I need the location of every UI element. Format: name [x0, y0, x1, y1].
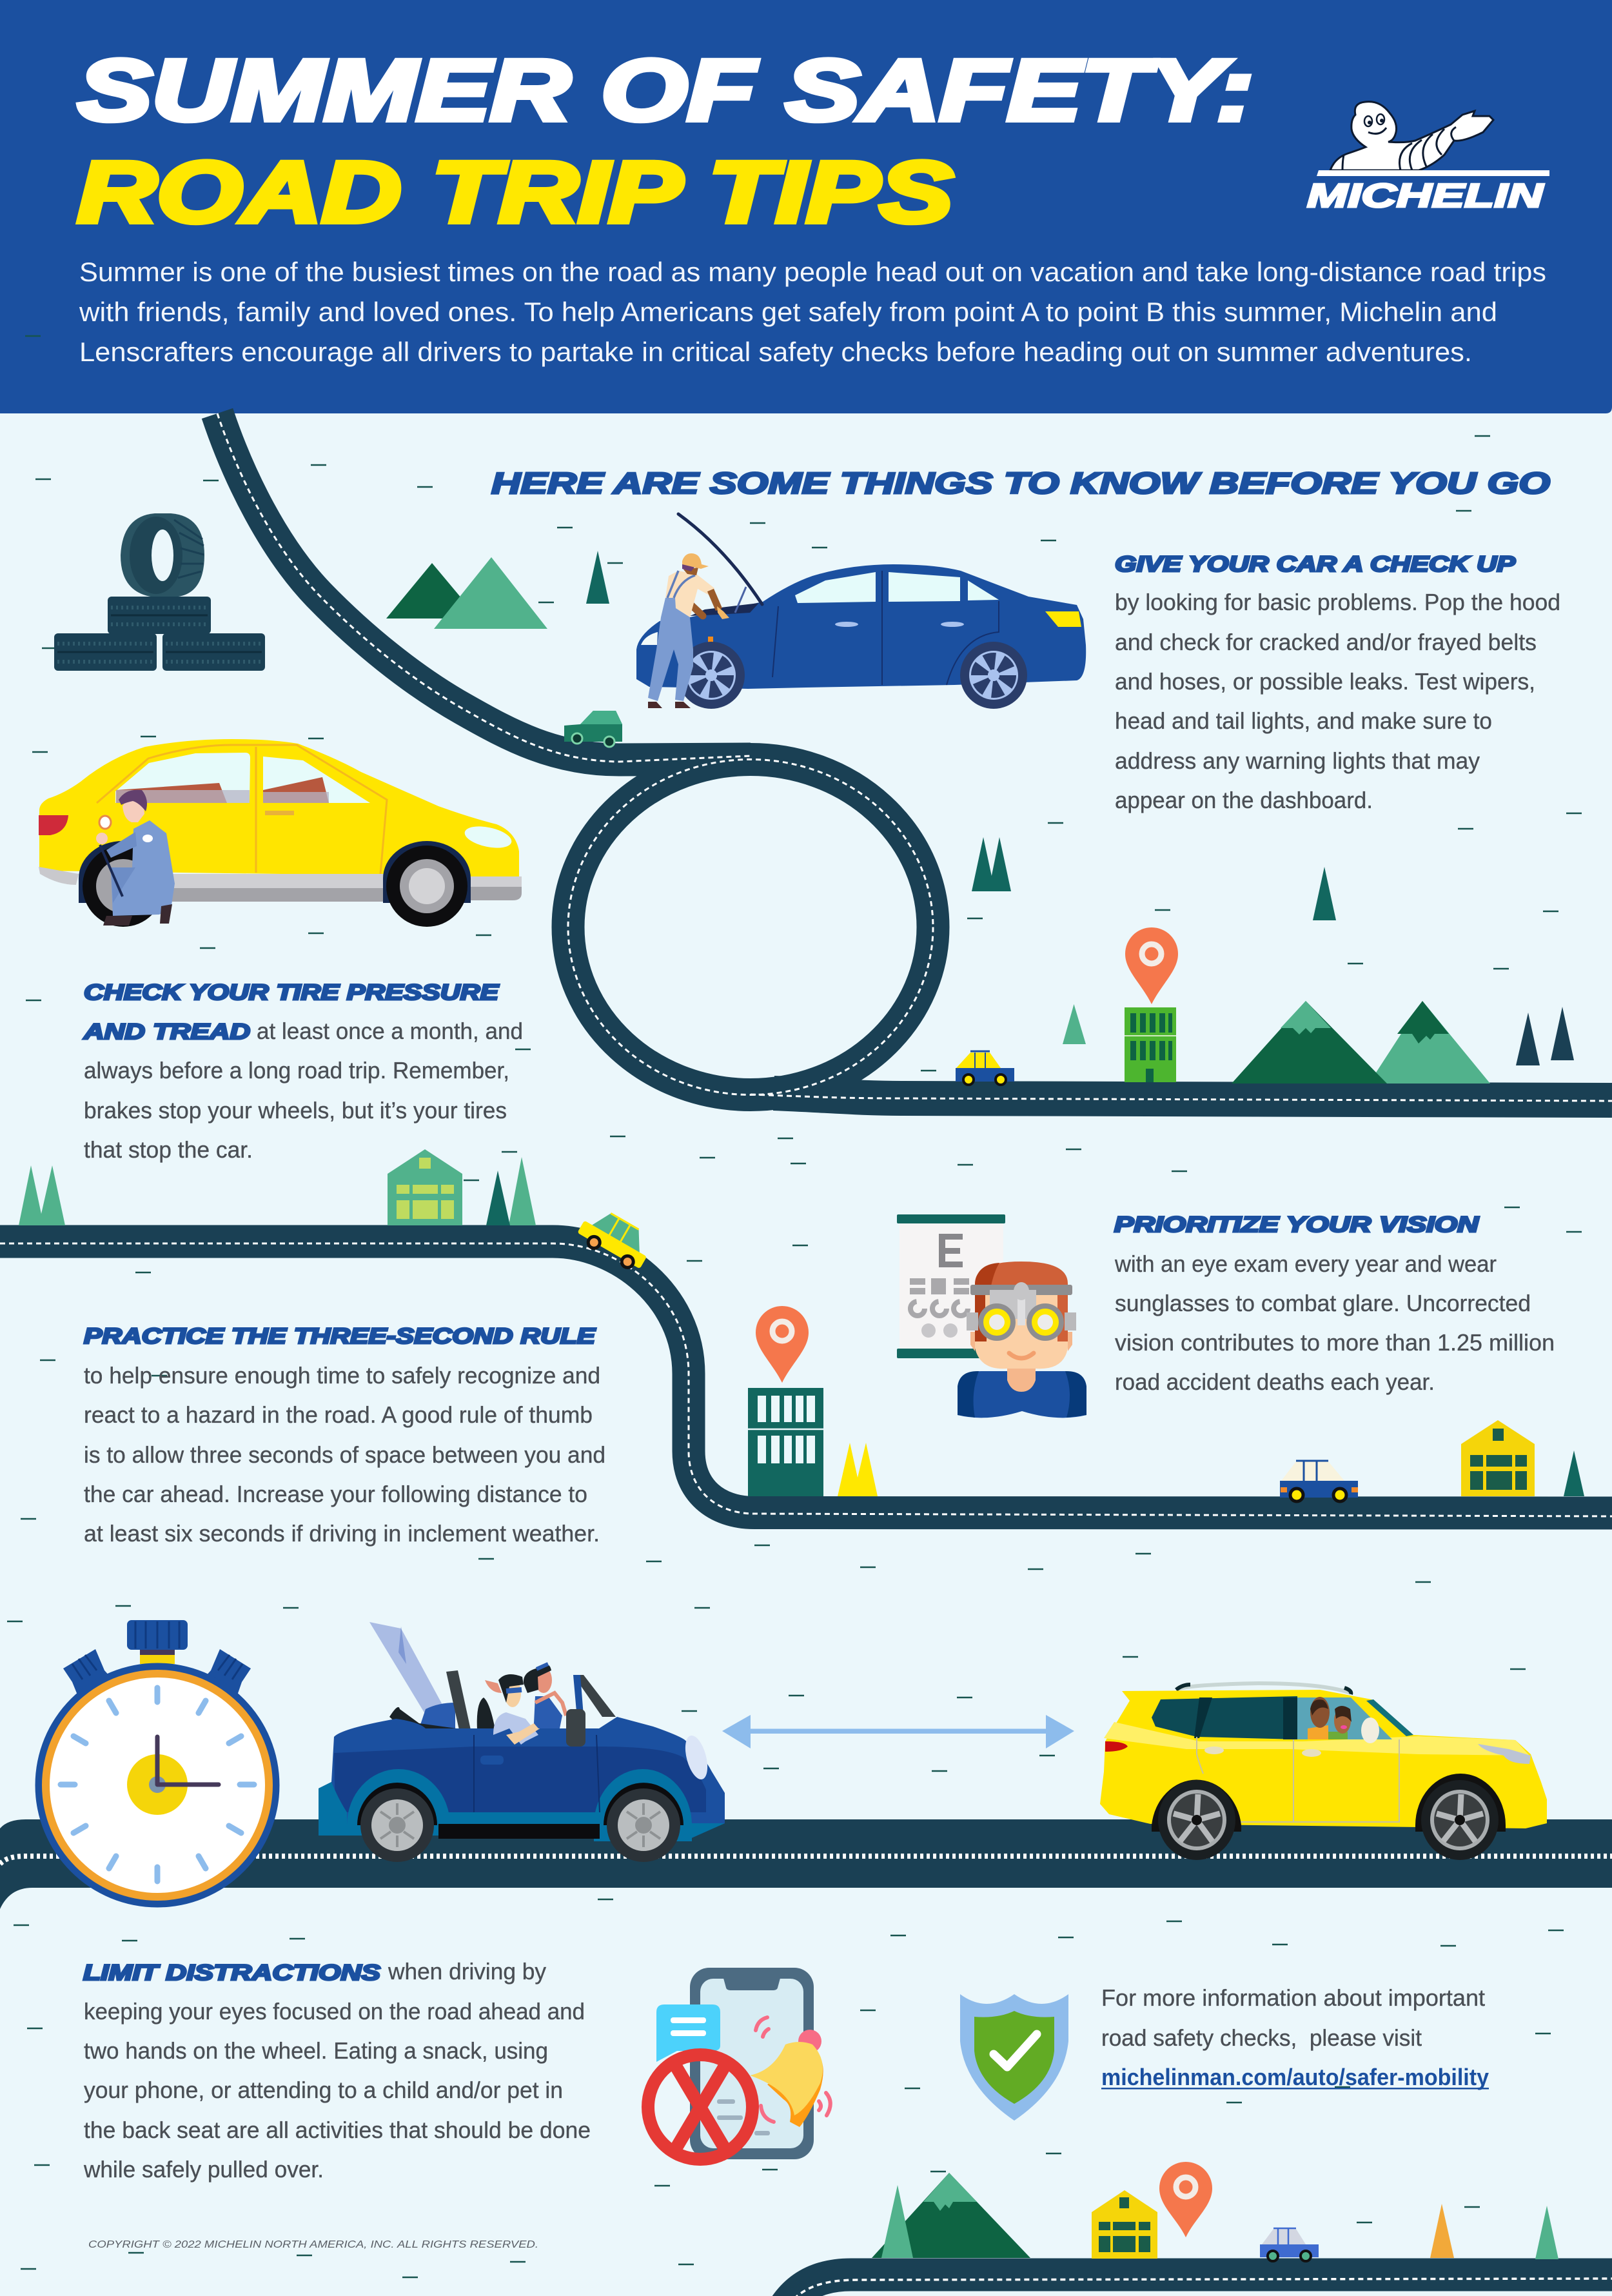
card: three-second rule: [84, 1324, 605, 1547]
card: limit distractions: LIMIT DISTRACTIONS: [83, 1961, 380, 1985]
intro paragraph: [79, 257, 1546, 367]
card: tire pressure: at least once a month, and: [257, 1018, 523, 1044]
card: check your car: by looking for basic problems. Pop the hood: [1115, 589, 1560, 615]
card: three-second rule: react to a hazard in the road. A good rule of thumb: [84, 1401, 593, 1428]
icon: bottom blue car: [1260, 2228, 1319, 2261]
card: tire pressure: always before a long road trip. Remember,: [84, 1057, 509, 1084]
card: limit distractions: the back seat are all activities that should be done: [84, 2117, 591, 2143]
trees and house on middle road: [19, 1149, 536, 1225]
yellow trees: [838, 1443, 878, 1496]
road: upper winding road with loop: [217, 413, 1612, 1101]
card: limit distractions: your phone, or attending to a child and/or pet in: [84, 2077, 563, 2103]
title line 2: ROAD TRIP TIPS: [77, 144, 953, 241]
card: tire pressure: brakes stop your wheels, but it’s your tires: [84, 1097, 507, 1123]
michelin logo: MICHELIN: [1307, 177, 1544, 215]
icon: stopwatch: [35, 1620, 280, 1908]
icon: map pin and green building: [1125, 927, 1178, 1082]
icon: small green car on road: [564, 711, 622, 747]
card: three-second rule: is to allow three seconds of space between you and: [84, 1441, 605, 1468]
more information text: [1101, 1984, 1489, 2090]
illustration: convertible car with passengers: [319, 1622, 725, 1862]
card: prioritize vision: sunglasses to combat glare. Uncorrected: [1115, 1290, 1531, 1316]
card: three-second rule: PRACTICE THE THREE-SECOND RULE: [84, 1324, 596, 1349]
card: prioritize vision: vision contributes to more than 1.25 million: [1115, 1329, 1555, 1356]
card: prioritize vision: road accident deaths each year.: [1115, 1369, 1435, 1395]
icon: phone with distractions: [648, 1968, 831, 2159]
title line 1: SUMMER OF SAFETY:: [78, 43, 1253, 139]
card: limit distractions: when driving by: [388, 1958, 546, 1984]
header band: [0, 0, 1612, 413]
card: check your car: GIVE YOUR CAR A CHECK UP: [1115, 552, 1515, 577]
card: tire pressure: [83, 980, 523, 1163]
card: three-second rule: at least six seconds if driving in inclement weather.: [84, 1520, 600, 1547]
bottom trees: [1430, 2204, 1558, 2259]
card: limit distractions: [83, 1958, 591, 2182]
card: check your car: appear on the dashboard.: [1115, 787, 1373, 813]
mountains right: [1232, 1001, 1490, 1084]
intro paragraph: Summer is one of the busiest times on the road as many people head out on vacation and take long-distance road trips: [79, 257, 1546, 287]
michelin logo: [1307, 102, 1549, 215]
card: check your car: head and tail lights, and make sure to: [1115, 708, 1492, 734]
icon: map pin and teal building: [748, 1306, 823, 1496]
more information text: road safety checks, please visit: [1101, 2024, 1422, 2051]
icon: stack of tires: [54, 513, 265, 671]
card: check your car: and hoses, or possible leaks. Test wipers,: [1115, 668, 1535, 695]
card: prioritize vision: PRIORITIZE YOUR VISION: [1114, 1212, 1480, 1237]
icon: bottom yellow house: [1092, 2190, 1157, 2259]
card: prioritize vision: [1114, 1212, 1555, 1395]
more information text: michelinman.com/auto/safer-mobility: [1101, 2064, 1489, 2090]
card: three-second rule: the car ahead. Increase your following distance to: [84, 1481, 587, 1507]
card: tire pressure: CHECK YOUR TIRE PRESSURE: [84, 980, 500, 1005]
card: limit distractions: while safely pulled over.: [83, 2156, 324, 2182]
icon: bottom map pin: [1159, 2162, 1212, 2237]
illustration: yellow car with mechanic: [39, 739, 522, 927]
card: limit distractions: keeping your eyes focused on the road ahead and: [84, 1998, 585, 2024]
patient with trial frame: [958, 1262, 1086, 1418]
road: middle S-curve road: [0, 1242, 1612, 1516]
card: check your car: [1115, 552, 1560, 813]
card: check your car: address any warning lights that may: [1115, 747, 1480, 774]
tire mechanic: [96, 790, 175, 925]
icon: small yellow car: [956, 1051, 1014, 1085]
illustration: eye exam: [897, 1214, 1086, 1418]
illustration: yellow SUV with passengers: [1100, 1683, 1547, 1860]
icon: yellow house: [1461, 1420, 1535, 1496]
road: bottom road: [781, 2275, 1612, 2296]
intro paragraph: Lenscrafters encourage all drivers to partake in critical safety checks before heading out on summer adventures.: [79, 337, 1472, 367]
passengers in window: [1308, 1697, 1379, 1743]
mechanic under hood: [648, 553, 729, 708]
card: check your car: and check for cracked and/or frayed belts: [1115, 629, 1537, 655]
copyright: COPYRIGHT © 2022 MICHELIN NORTH AMERICA, INC. ALL RIGHTS RESERVED.: [88, 2239, 538, 2250]
section heading: HERE ARE SOME THINGS TO KNOW BEFORE YOU GO: [491, 466, 1550, 500]
road: wide lower road: [0, 1819, 1612, 1909]
illustration: blue car with mechanic: [636, 514, 1086, 709]
tree by yellow house: [1564, 1450, 1584, 1496]
icon: small blue car: [1280, 1461, 1358, 1501]
mountains and tree near road: [386, 551, 609, 629]
card: tire pressure: AND TREAD: [83, 1020, 250, 1044]
more information text: For more information about important: [1101, 1984, 1485, 2011]
card: three-second rule: to help ensure enough time to safely recognize and: [84, 1362, 600, 1389]
intro paragraph: with friends, family and loved ones. To help Americans get safely from point A to point B this summer, Michelin and: [79, 297, 1497, 327]
icon: yellow car on curve: [575, 1203, 656, 1274]
card: tire pressure: that stop the car.: [84, 1136, 253, 1163]
trees along loop: [972, 837, 1574, 1065]
driver and passenger: [485, 1664, 566, 1745]
bottom scenery: mountain and trees: [872, 2173, 1030, 2258]
icon: shield with checkmark: [960, 1994, 1068, 2121]
arrow: following distance: [722, 1715, 1074, 1748]
card: prioritize vision: with an eye exam every year and wear: [1114, 1251, 1497, 1277]
card: limit distractions: two hands on the wheel. Eating a snack, using: [84, 2037, 548, 2064]
